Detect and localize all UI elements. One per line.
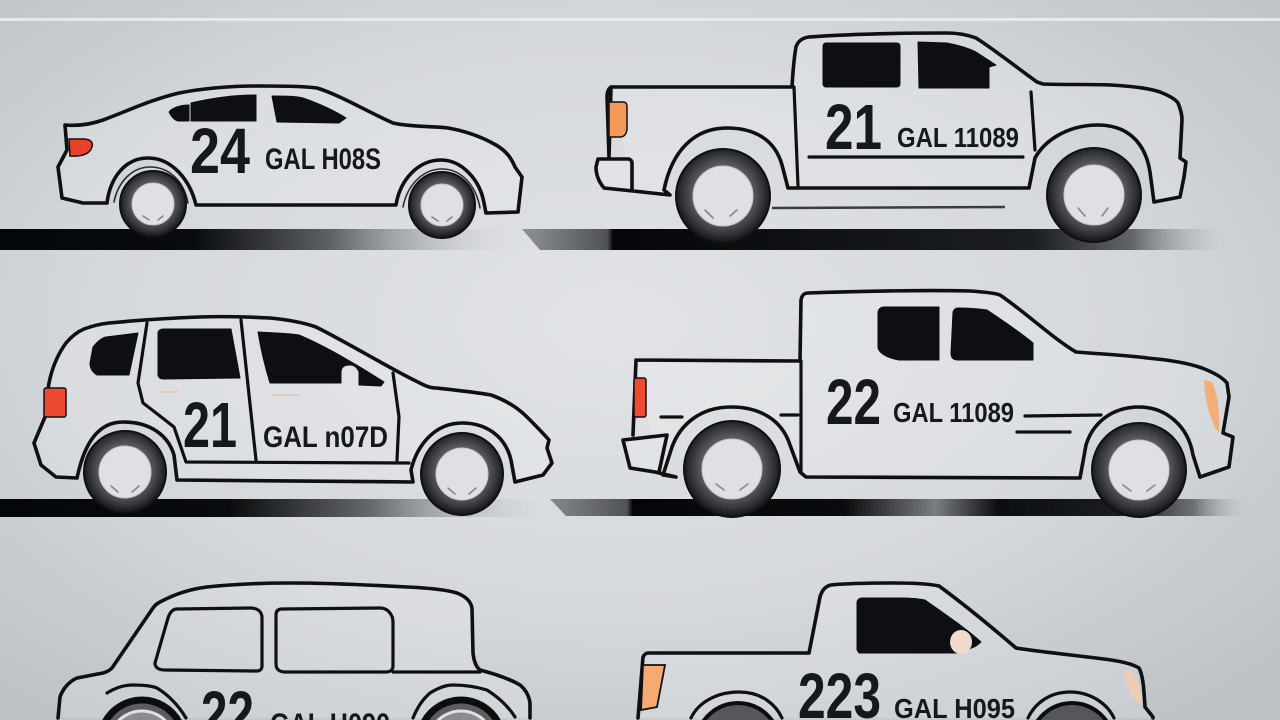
wheel front (1036, 701, 1108, 720)
windows (878, 307, 1033, 360)
ground shadow: row 1 right (522, 229, 1232, 250)
tail light (69, 139, 92, 156)
vehicle: hatchback, 21 gal (34, 317, 552, 515)
vehicle: pickup, 21 gal (596, 33, 1186, 243)
value: 22 (826, 366, 881, 438)
window glare (950, 630, 972, 654)
wheel front (421, 433, 503, 515)
wheel front (1092, 423, 1186, 517)
ground shadow: row 2 right (550, 499, 1250, 516)
vehicle: boxy wagon, 22 gal (58, 583, 530, 720)
windows (823, 42, 996, 88)
windows (90, 329, 384, 386)
tail light (609, 102, 627, 137)
label: GAL n07D (263, 421, 388, 454)
headlight (1124, 670, 1141, 704)
wheel front (1047, 148, 1141, 242)
tail light (641, 665, 665, 710)
wheel front (421, 697, 501, 720)
door glints (157, 392, 300, 395)
wheel rear (84, 431, 166, 513)
vehicle: compact pickup, 223 gal (638, 583, 1153, 720)
wheel rear (102, 697, 182, 720)
wheel rear (120, 171, 186, 237)
windows (169, 95, 346, 123)
vehicle: sedan, 24 gal (58, 86, 522, 238)
tail light (44, 388, 66, 417)
value: 24 (190, 115, 250, 187)
wheel rear (684, 421, 780, 517)
label: GAL 11089 (897, 122, 1019, 153)
window (857, 598, 981, 653)
headlight (1204, 380, 1219, 433)
tail light (634, 378, 646, 417)
ground shadow: row 1 left (0, 229, 510, 250)
wheel rear (702, 701, 774, 720)
label: GAL 11089 (893, 397, 1014, 428)
wheel rear (676, 149, 770, 243)
vehicle: extended pickup, 22 gal (623, 291, 1233, 517)
value: 21 (825, 91, 882, 163)
wheel front (409, 172, 475, 238)
ground shadow: row 2 left (0, 499, 545, 517)
value: 21 (183, 389, 237, 461)
label: GAL H08S (265, 143, 381, 176)
